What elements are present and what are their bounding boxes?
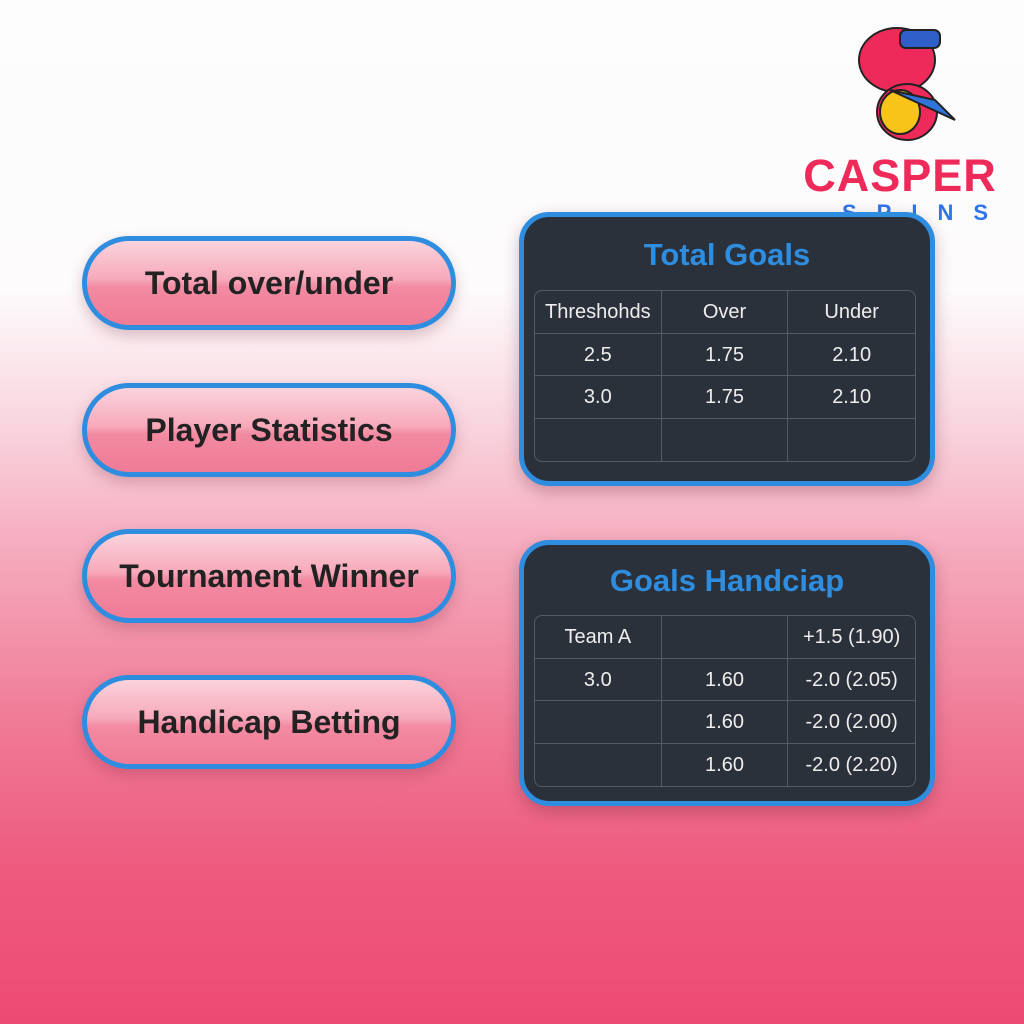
panel: Total Goals: [519, 212, 935, 486]
table: goals handicap: Team A: [564, 626, 631, 648]
panel: Goals Handicap: [519, 540, 935, 806]
table: goals handicap: -2.0 (2.00): [806, 711, 898, 733]
table: total goals: 3.0: [584, 386, 612, 408]
heading: Total Goals: Total Goals: [644, 237, 810, 272]
table: goals handicap: 1.60: [705, 669, 744, 691]
logo text: SPINS: SPINS: [842, 200, 1008, 225]
table: total goals: 2.5: [584, 344, 612, 366]
button: Total over/under: Total over/under: [145, 264, 393, 300]
button: Handicap Betting: [82, 675, 456, 769]
table: total goals: Under: [824, 301, 879, 323]
button: Tournament Winner: Tournament Winner: [119, 558, 419, 594]
button: Player Statistics: [82, 383, 456, 477]
table: total goals: 1.75: [705, 386, 744, 408]
table: goals handicap: +1.5 (1.90): [803, 626, 900, 648]
table: goals handicap: -2.0 (2.20): [806, 754, 898, 776]
table: total goals: 1.75: [705, 344, 744, 366]
table: goals handicap: -2.0 (2.05): [806, 669, 898, 691]
table: total goals: 2.10: [832, 344, 871, 366]
button: Total over/under: [82, 236, 456, 330]
icon: dino mascot: [858, 27, 956, 141]
heading: Goals Handciap: Goals Handciap: [610, 563, 844, 598]
button: Tournament Winner: [82, 529, 456, 623]
table: goals handicap: 3.0: [584, 669, 612, 691]
table: total goals: Threshohds: [545, 301, 651, 323]
table: goals handicap: 1.60: [705, 711, 744, 733]
logo: [803, 27, 1008, 225]
table: total goals: Over: [703, 301, 746, 323]
logo text: CASPER: CASPER: [803, 150, 997, 201]
table: total goals: [534, 290, 916, 462]
table: goals handicap: [534, 615, 916, 787]
table: goals handicap: 1.60: [705, 754, 744, 776]
button: Player Statistics: Player Statistics: [145, 412, 393, 448]
table: total goals: 2.10: [832, 386, 871, 408]
button: Handicap Betting: Handicap Betting: [137, 704, 401, 740]
